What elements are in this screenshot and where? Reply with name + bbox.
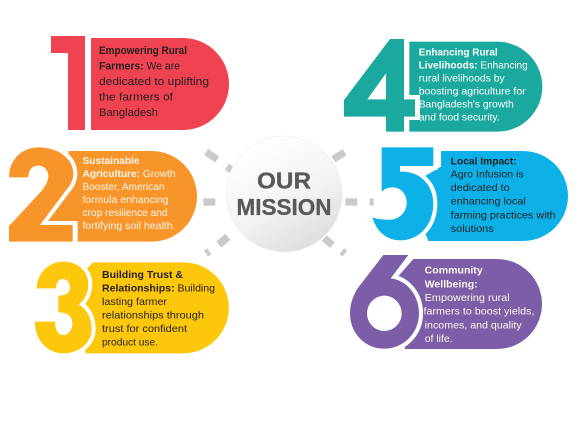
text 3 <box>102 269 215 348</box>
text 2: formula enhancing <box>82 194 169 206</box>
panel 6: community wellbeing <box>350 255 542 349</box>
center rays <box>203 149 374 256</box>
pill 4 <box>409 42 542 132</box>
text 2: fortifying soil health. <box>82 220 176 232</box>
panel 4: enhancing rural livelihoods <box>344 39 542 132</box>
text 1: Bangladesh <box>99 107 158 119</box>
number 4 <box>344 39 415 132</box>
text 5 <box>451 155 556 235</box>
text 3: trust for confident <box>102 323 187 335</box>
text 4: Livelihoods: Enhancing <box>419 59 528 71</box>
pill 6 <box>395 259 542 349</box>
text 4: rural livelihoods by <box>419 72 505 84</box>
number 3 <box>35 262 92 353</box>
panel 5: local impact <box>372 147 568 241</box>
pill 5 <box>415 151 568 241</box>
text 2: crop resilience and <box>82 207 168 219</box>
pill 3 <box>77 262 229 353</box>
text 5: farming practices with <box>451 209 556 221</box>
center circle: our mission <box>226 136 342 252</box>
text 5: Local Impact: <box>451 155 517 167</box>
panel 2: sustainable agriculture <box>9 147 197 242</box>
panel 3: building trust and relationships <box>35 262 229 353</box>
text 2: Booster, American <box>82 181 165 193</box>
text 4: Bangladesh's growth <box>419 98 514 110</box>
text 2 <box>82 155 176 232</box>
text 4: Enhancing Rural <box>419 46 498 58</box>
number 5 <box>372 147 433 240</box>
text 1: dedicated to uplifting <box>99 76 209 88</box>
pill 2 <box>47 151 197 242</box>
text 5: Agro Infusion is <box>451 169 524 181</box>
heading: MISSION <box>236 194 332 220</box>
text 4: boosting agriculture for <box>419 85 526 97</box>
text 4: and food security. <box>419 111 500 123</box>
text 3: product use. <box>102 336 158 348</box>
number 2 <box>9 147 73 242</box>
text 3: Building Trust & <box>102 269 183 281</box>
text 6: Empowering rural <box>425 292 510 304</box>
number 1 <box>51 36 85 130</box>
text 6: Wellbeing: <box>425 278 478 290</box>
text 4 <box>419 46 528 123</box>
pill 1 <box>91 38 229 130</box>
text 5: dedicated to <box>451 182 510 194</box>
text 6: Community <box>425 265 483 277</box>
text 1: Empowering Rural <box>99 45 187 57</box>
text 1: Farmers: We are <box>99 60 180 72</box>
text 6 <box>424 265 534 345</box>
text 1: the farmers of <box>99 92 174 104</box>
text 5: enhancing local <box>451 196 526 208</box>
number 6 <box>350 255 419 349</box>
panel 1: empowering rural farmers <box>51 36 229 130</box>
text 2: Agriculture: Growth <box>82 168 176 180</box>
text 2: Sustainable <box>82 155 140 167</box>
text 3: lasting farmer <box>102 296 168 308</box>
text 1 <box>99 45 209 119</box>
heading <box>236 168 332 220</box>
text 6: of life. <box>425 333 453 345</box>
text 6: farmers to boost yields, <box>424 306 534 318</box>
text 5: solutions <box>451 223 494 235</box>
text 3: relationships through <box>102 310 204 322</box>
text 6: incomes, and quality <box>425 319 522 331</box>
heading: OUR <box>257 168 311 194</box>
text 3: Relationships: Building <box>102 282 215 294</box>
